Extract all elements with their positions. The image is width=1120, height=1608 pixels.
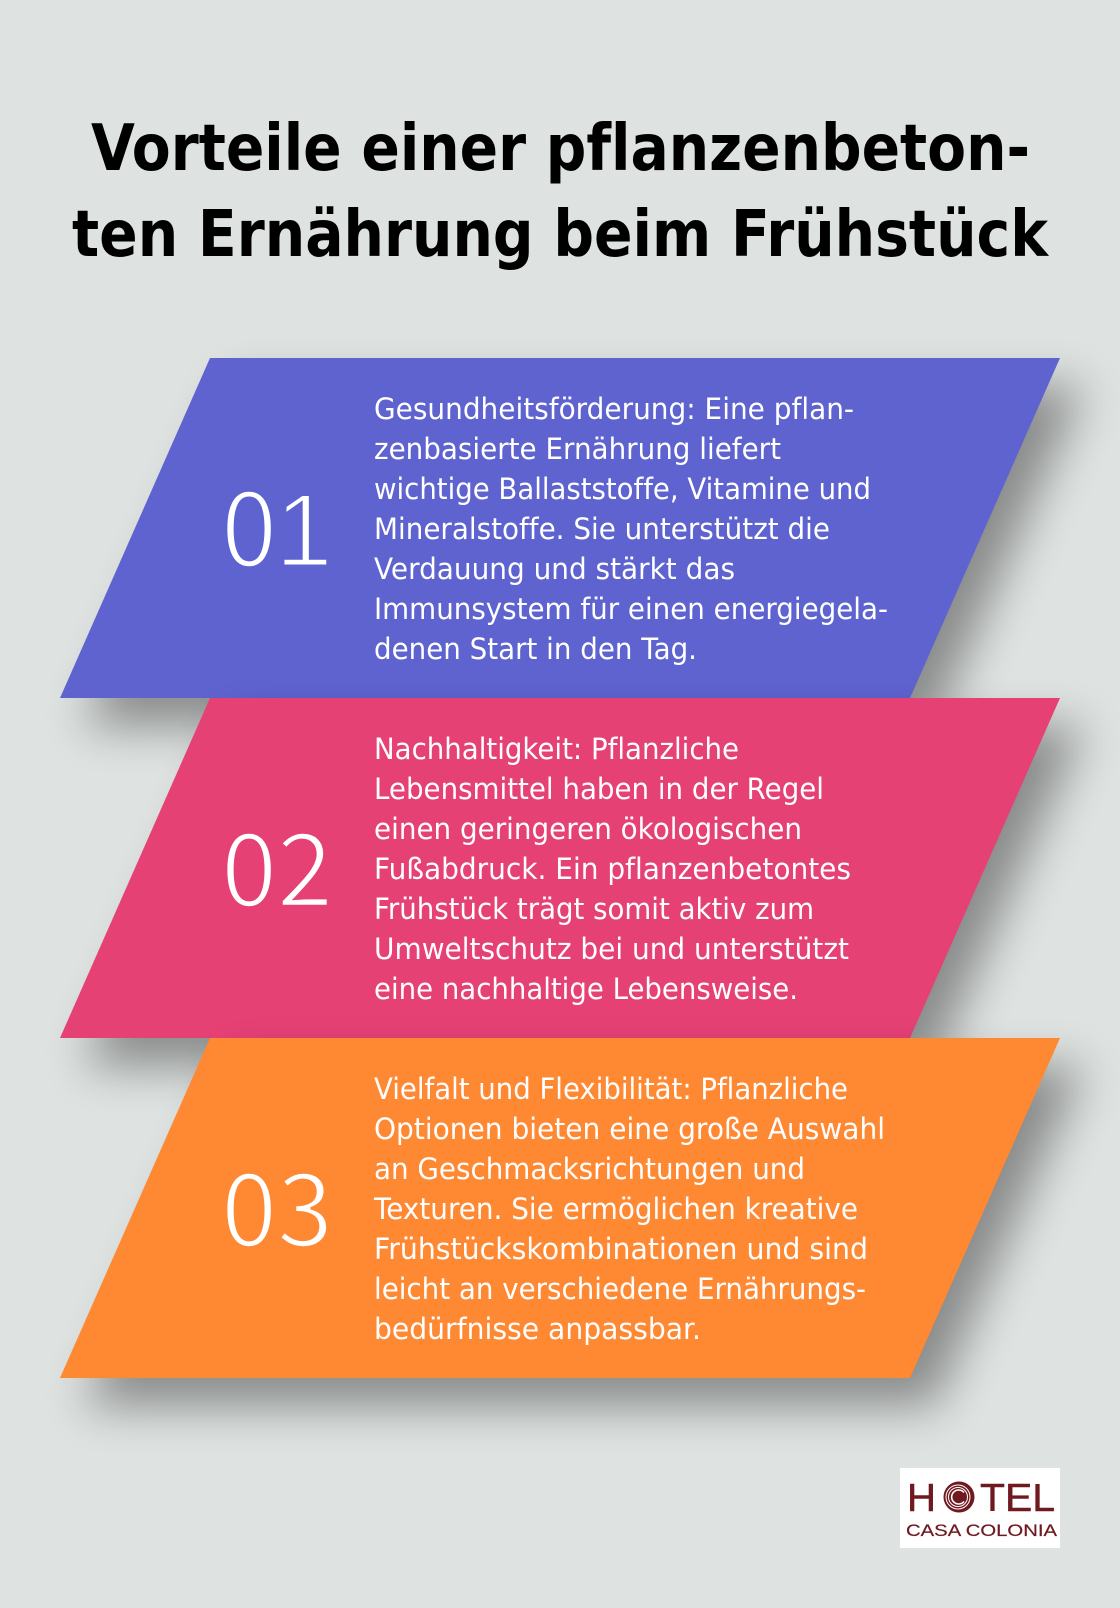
text block: Gesundheitsförderung: zenbasierte Ernährung liefert: [374, 432, 781, 466]
text block: Vielfalt und Flexibilität: Texturen. Sie ermöglichen kreative: [373, 1192, 858, 1226]
number 01: 0: [221, 450, 277, 596]
title: [72, 112, 1049, 272]
text block: Nachhaltigkeit: eine nachhaltige Lebensweise.: [374, 972, 798, 1006]
title: Vorteile einer pflanzenbeton-: [91, 112, 1030, 186]
number 01: 1: [275, 473, 333, 589]
text block: Gesundheitsförderung: Gesundheitsförderung: Eine pflan-: [374, 392, 854, 426]
number 02: 02: [221, 790, 333, 936]
text block: Nachhaltigkeit: Fußabdruck. Ein pflanzenbetontes: [374, 852, 851, 886]
panel: 03 Vielfalt und Flexibilität: [60, 1038, 1084, 1406]
icon: concentric circle with C: [944, 1482, 974, 1512]
text block: Gesundheitsförderung: Mineralstoffe. Sie unterstützt die: [374, 512, 830, 546]
text block: Gesundheitsförderung: wichtige Ballaststoffe, Vitamine und: [374, 472, 871, 506]
text block: Nachhaltigkeit: Umweltschutz bei und unterstützt: [374, 932, 849, 966]
text block: Gesundheitsförderung: Verdauung und stärkt das: [374, 552, 735, 586]
number 03: 03: [221, 1130, 333, 1276]
text block: Gesundheitsförderung: Immunsystem für einen energiegela-: [374, 592, 888, 626]
text block: Nachhaltigkeit: Lebensmittel haben in der Regel: [374, 772, 824, 806]
text block: Gesundheitsförderung: denen Start in den Tag.: [374, 632, 697, 666]
text block: Nachhaltigkeit: Nachhaltigkeit: Pflanzliche: [374, 732, 739, 766]
text block: Vielfalt und Flexibilität: Optionen bieten eine große Auswahl: [374, 1112, 885, 1146]
panel: 01 Gesundheitsförderung: [60, 358, 1084, 726]
text block: Vielfalt und Flexibilität: Vielfalt und Flexibilität: Pflanzliche: [374, 1072, 848, 1106]
text block: Vielfalt und Flexibilität: leicht an verschiedene Ernährungs-: [374, 1272, 866, 1306]
text block: Vielfalt und Flexibilität: an Geschmacksrichtungen und: [374, 1152, 805, 1186]
logo: Hotel Casa Colonia: H: [907, 1477, 936, 1520]
text block: Nachhaltigkeit: Frühstück trägt somit aktiv zum: [374, 892, 814, 926]
logo: Hotel Casa Colonia: CASA COLONIA: [906, 1522, 1057, 1540]
panel: 02 Nachhaltigkeit: [60, 698, 1084, 1066]
text block: Nachhaltigkeit: [374, 732, 851, 1006]
logo: Hotel Casa Colonia: TEL: [980, 1477, 1055, 1520]
text block: Vielfalt und Flexibilität: [373, 1072, 885, 1346]
text block: Nachhaltigkeit: einen geringeren ökologischen: [374, 812, 802, 846]
text block: Gesundheitsförderung: [374, 392, 888, 666]
text block: Vielfalt und Flexibilität: bedürfnisse anpassbar.: [374, 1312, 701, 1346]
logo: Hotel Casa Colonia: [900, 1468, 1060, 1548]
text block: Vielfalt und Flexibilität: Frühstückskombinationen und sind: [374, 1232, 868, 1266]
